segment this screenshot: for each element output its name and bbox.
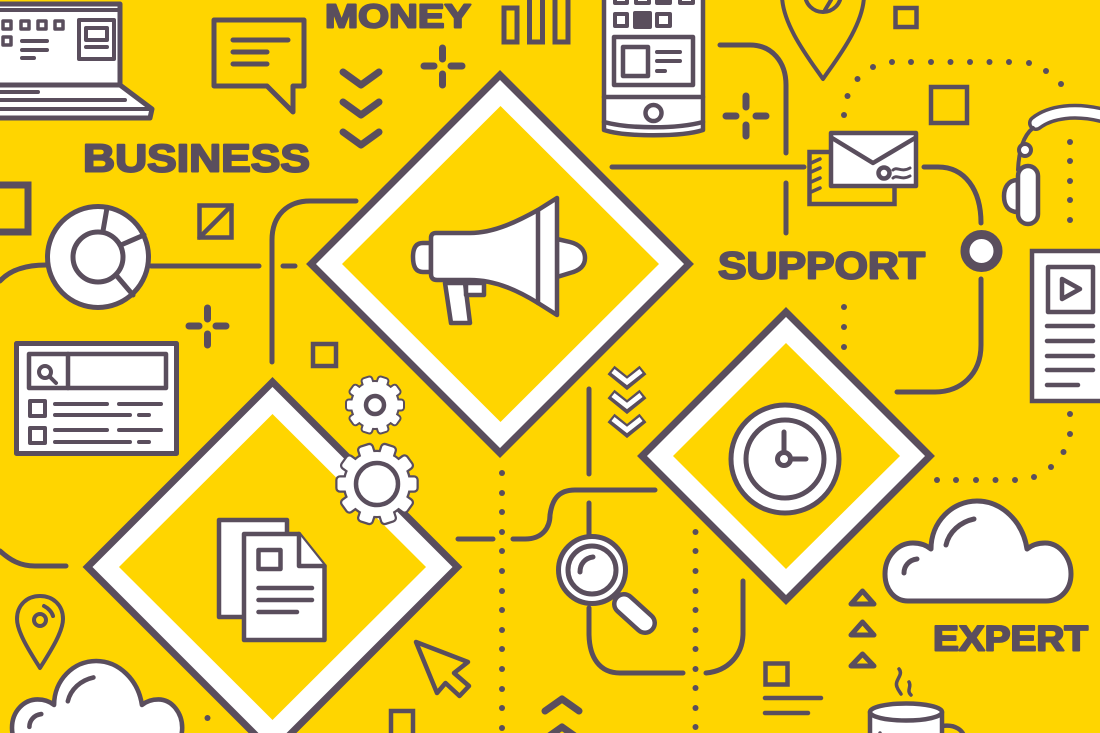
heading: expert: EXPERT xyxy=(933,620,1088,658)
icon: large gear xyxy=(338,444,416,524)
icon: cursor arrow xyxy=(416,642,469,696)
icon: small gear xyxy=(347,377,403,433)
icon: cloud left xyxy=(12,661,182,733)
icon: search panel xyxy=(16,344,176,454)
icon: sparkle top xyxy=(424,48,462,85)
icon: cropped square xyxy=(0,185,28,232)
icon: white chevrons xyxy=(611,370,643,431)
main diamond frame xyxy=(311,75,689,453)
icon: magnifier xyxy=(558,536,645,623)
icon: location pin top xyxy=(782,0,864,79)
icon: phone xyxy=(604,0,703,135)
icon: small square centre xyxy=(313,344,336,366)
icon: laptop xyxy=(0,4,152,118)
icon: sparkle right xyxy=(726,96,766,136)
icon: donut chart xyxy=(48,206,148,308)
icon: video document xyxy=(1032,251,1100,401)
icon: sparkle left xyxy=(189,308,226,345)
heading: business: BUSINESS xyxy=(83,138,310,180)
icon: coffee cup xyxy=(870,669,965,733)
clock diamond frame xyxy=(642,312,930,600)
dotted lines xyxy=(204,59,1073,731)
lower-left diamond frame xyxy=(88,382,458,733)
icon: triangles xyxy=(851,591,874,666)
icon: note with lines xyxy=(765,664,821,713)
icon: envelope xyxy=(810,133,916,204)
icon: documents xyxy=(219,520,324,640)
icon: down chevrons xyxy=(343,72,379,145)
icon: megaphone xyxy=(413,198,585,323)
icon: headphones xyxy=(1004,112,1100,224)
icon: cloud right xyxy=(885,501,1071,601)
icon: large square xyxy=(931,87,967,123)
icon: ring node xyxy=(965,234,998,268)
heading: support: SUPPORT xyxy=(718,246,925,288)
icon: clock xyxy=(731,405,839,513)
icon: up chevrons bottom xyxy=(545,699,579,733)
connector lines xyxy=(0,45,981,673)
icon: bar chart xyxy=(504,0,568,42)
icon: small square bottom xyxy=(391,711,413,733)
icon: small square top xyxy=(896,8,916,27)
icon: speech bubble xyxy=(214,20,304,112)
icon: slashed square xyxy=(200,206,232,238)
icon: location pin left xyxy=(17,596,63,668)
